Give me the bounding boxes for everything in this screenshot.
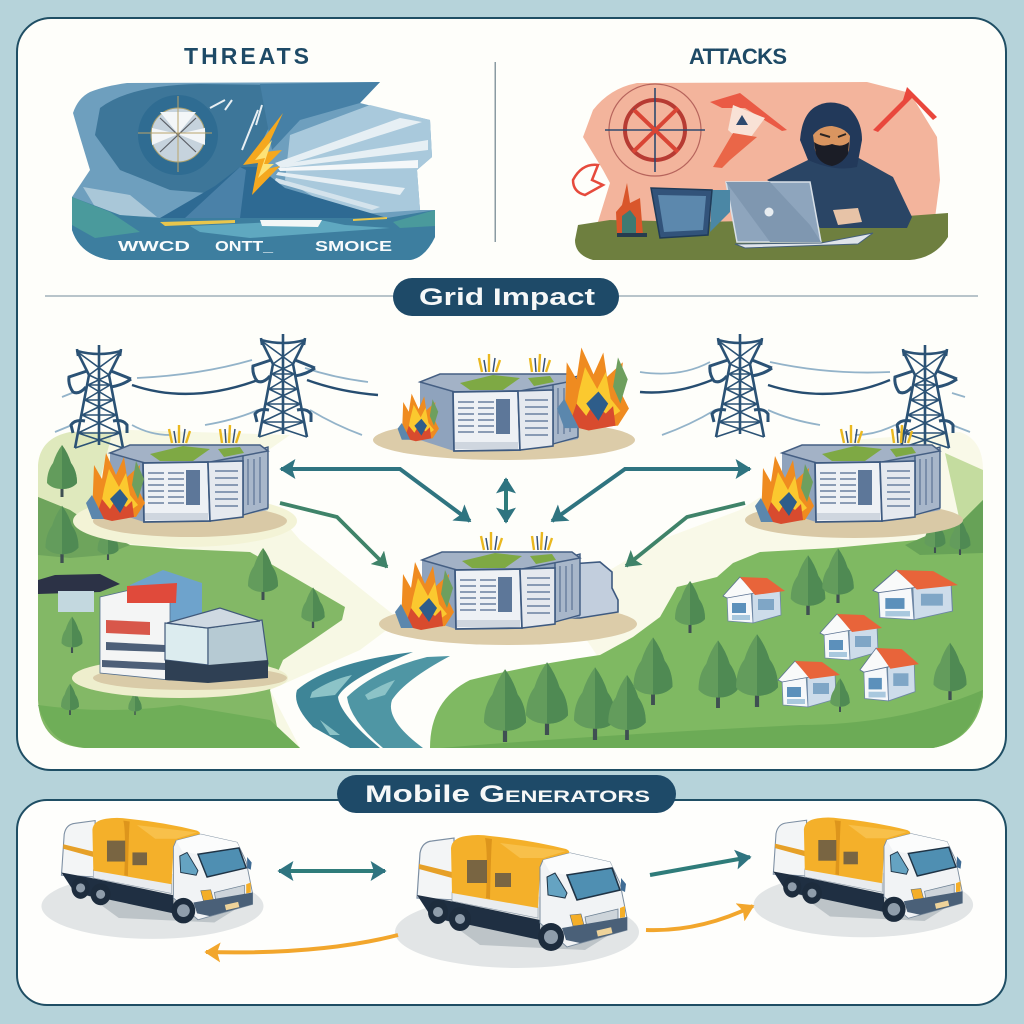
right pale band xyxy=(560,432,983,660)
panel: mobile generators frame xyxy=(17,800,1006,1005)
icon: hurricane eye disc xyxy=(138,96,212,172)
factory xyxy=(72,570,288,698)
pale upper meadow xyxy=(38,430,400,748)
substation: left xyxy=(73,425,297,547)
vertical divider xyxy=(494,62,496,242)
illustration: attacks hacker at laptop xyxy=(573,82,948,260)
illustration: threats storm and volcano xyxy=(72,82,435,260)
tower 4 xyxy=(895,345,957,448)
trees xyxy=(46,445,970,742)
laptop second xyxy=(710,190,730,232)
landscape: green terrain xyxy=(38,430,983,748)
pond xyxy=(38,574,120,612)
fire xyxy=(557,348,629,431)
fire xyxy=(395,562,454,630)
tower 3 xyxy=(710,334,772,437)
power lines xyxy=(55,360,970,435)
pill heading: grid impact xyxy=(393,278,619,316)
right green lobe xyxy=(430,500,983,748)
horizontal rule xyxy=(45,295,978,297)
pill heading: mobile generators xyxy=(337,775,676,813)
arrow: top to centre xyxy=(504,479,508,522)
illustration: threats storm and volcano: SMOICE xyxy=(315,238,392,255)
garbled caption words: WWCD xyxy=(118,238,190,255)
pill heading: grid impact: Grid Impact xyxy=(419,284,595,311)
heading: attacks: ATTACKS xyxy=(689,44,787,69)
houses xyxy=(723,570,958,712)
heading: threats: THREATS xyxy=(184,43,309,69)
laptop main xyxy=(726,182,821,242)
truck: right xyxy=(754,818,973,937)
arrow: centre to left orange xyxy=(206,935,398,952)
panel: main xyxy=(17,18,1006,770)
tower 2 xyxy=(253,334,315,437)
volcano xyxy=(160,167,387,218)
arrow: centre to right teal xyxy=(650,857,750,875)
arrow: right to centre xyxy=(552,469,750,521)
tower 1 xyxy=(69,345,131,448)
wing xyxy=(570,562,618,618)
truck: centre xyxy=(395,835,639,968)
left green lobe xyxy=(38,497,345,748)
fire xyxy=(755,456,814,524)
substation: right xyxy=(745,425,963,538)
icon: lightning bolt xyxy=(243,113,283,195)
arrow: green right xyxy=(626,503,745,566)
truck: left xyxy=(41,818,263,939)
river xyxy=(296,652,450,748)
arrow: left to centre xyxy=(281,469,470,521)
pill heading: mobile generators: Mobile Generators xyxy=(365,781,650,808)
flame device xyxy=(616,183,643,235)
sea xyxy=(72,197,435,260)
icon: crossed target xyxy=(605,84,705,176)
lightning streaks white xyxy=(210,100,262,150)
fire xyxy=(86,453,145,521)
substation: centre xyxy=(379,532,637,645)
arrow: centre to right orange xyxy=(646,906,753,930)
illustration: threats storm and volcano: ONTT_ xyxy=(215,238,274,255)
arrow: green left xyxy=(280,503,387,567)
substation: top xyxy=(373,348,635,460)
wind streaks xyxy=(274,118,428,210)
arrow: left and centre trucks xyxy=(279,869,385,873)
desk xyxy=(575,213,948,260)
hacker figure xyxy=(767,157,912,228)
